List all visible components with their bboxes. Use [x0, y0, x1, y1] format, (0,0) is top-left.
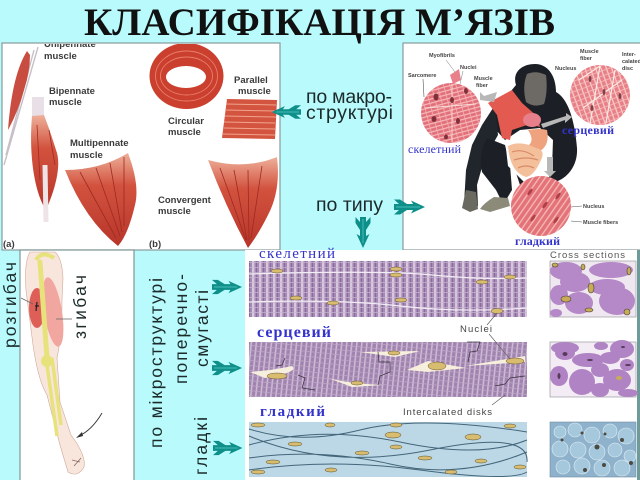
text: multipennate muscle: muscle	[70, 150, 103, 161]
text: nuclei: Nuclei	[460, 324, 492, 335]
arrow: down to microstructure	[356, 217, 370, 248]
text: smooth label: гладкий	[515, 234, 560, 248]
icon: unipennate muscle	[4, 47, 38, 165]
text: cardiac label: серцевий	[562, 123, 614, 137]
labels: small anatomical labels: fiber	[580, 56, 593, 62]
icon: circular muscle	[150, 43, 224, 109]
labels: small anatomical labels: Inter-	[622, 52, 636, 58]
labels: small anatomical labels: disc	[622, 66, 633, 72]
text: circular muscle: Circular	[168, 116, 204, 127]
labels: small anatomical labels: Muscle	[474, 76, 493, 82]
text: striated line one: поперечно-	[171, 274, 191, 384]
arrow: to cardiac tissue	[212, 361, 242, 375]
text: multipennate muscle: Multipennate	[70, 138, 129, 149]
text: by macrostructure: по макро-	[306, 86, 392, 108]
icon: arm with flexor and extensor	[21, 252, 84, 474]
text: bipennate muscle: muscle	[49, 97, 82, 108]
text: figure b: (b)	[149, 239, 161, 250]
text: by type: по типу	[316, 194, 383, 216]
icon: chimpanzee	[462, 64, 577, 212]
panel: muscle shapes by macrostructure	[2, 39, 280, 250]
title: КЛАСИФІКАЦІЯ М’ЯЗІВ	[84, 1, 555, 44]
text: convergent muscle: Convergent	[158, 195, 212, 206]
chart: smooth cross section	[550, 422, 636, 477]
labels: small anatomical labels: Nucleus	[555, 66, 576, 72]
text: intercalated disks: Intercalated disks	[403, 407, 492, 418]
arrow: to muscle type panel	[394, 200, 425, 214]
text: skeletal label: скелетний	[259, 246, 335, 262]
chart: cardiac tissue strip	[249, 342, 527, 397]
text: skeletal label: скелетний	[408, 142, 462, 156]
chart: cardiac cross section	[550, 340, 638, 397]
text: unipennate muscle: Unipennate	[44, 39, 96, 50]
panel: muscle types on chimpanzee	[403, 43, 640, 250]
text: parallel muscle: Parallel	[234, 75, 268, 86]
text: figure a: (a)	[3, 239, 15, 250]
text: circular muscle: muscle	[168, 127, 201, 138]
arrow: to skeletal tissue	[212, 280, 242, 294]
text: parallel muscle: muscle	[238, 86, 271, 97]
labels: small anatomical labels: Muscle	[580, 49, 599, 55]
icon: bipennate muscle	[31, 97, 58, 222]
arrow: to smooth tissue	[213, 441, 242, 455]
icon: convergent muscle	[208, 157, 278, 248]
labels: small anatomical labels: Sarcomere	[408, 73, 436, 79]
labels: small anatomical labels	[408, 49, 640, 226]
icon: smooth muscle circle	[511, 176, 571, 236]
chart: skeletal tissue strip	[249, 261, 527, 317]
labels: small anatomical labels: Muscle fibers	[583, 220, 618, 226]
icon: parallel muscle	[222, 99, 277, 139]
text: smooth label: гладкий	[260, 404, 325, 420]
chart: skeletal cross section	[550, 261, 636, 317]
text: unipennate muscle: muscle	[44, 51, 77, 62]
icon: cardiac muscle circle	[570, 65, 630, 125]
arrow: gray to smooth circle	[544, 157, 556, 177]
arrow: gray to skeletal circle	[480, 92, 497, 102]
text: extensor: розгибач	[0, 262, 20, 348]
arrow: gray to cardiac circle	[541, 113, 572, 128]
text: flexor: згибач	[70, 275, 90, 339]
labels: small anatomical labels: Nucleus	[583, 204, 604, 210]
labels: small anatomical labels: fiber	[476, 83, 489, 89]
text: cardiac label: серцевий	[257, 324, 331, 341]
labels: small anatomical labels: Myofibrils	[429, 53, 455, 59]
panel: microscopic tissue	[245, 246, 640, 480]
arrow: arm flexion curve	[76, 413, 102, 438]
icon: multipennate muscle	[65, 153, 136, 246]
text: by microstructure: по мікроструктурі	[146, 278, 166, 448]
text: cross sections: Cross sections	[550, 250, 625, 261]
labels: small anatomical labels: Nuclei	[460, 65, 477, 71]
text: smooth: гладкі	[191, 417, 211, 475]
chart: smooth tissue strip	[249, 422, 527, 477]
text: bipennate muscle: Bipennate	[49, 86, 95, 97]
icon: skeletal muscle circle	[421, 69, 481, 143]
arrow: to macrostructure panel	[272, 105, 301, 119]
text: by macrostructure: структурі	[306, 102, 393, 124]
text: striated line two: смугасті	[192, 290, 212, 367]
panel: arm muscles	[20, 250, 134, 480]
text: convergent muscle: muscle	[158, 206, 191, 217]
